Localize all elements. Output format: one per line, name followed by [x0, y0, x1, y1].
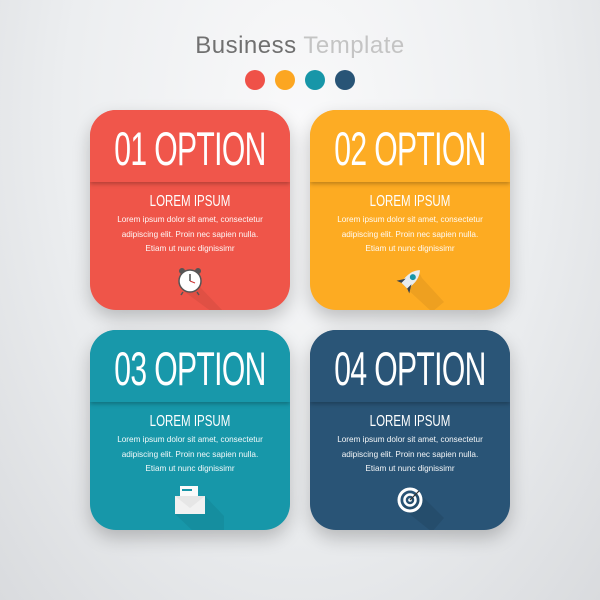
icon: alarm clock: [178, 268, 222, 310]
text block: Etiam ut nunc dignissimr: [365, 244, 455, 253]
heading: 04 option: 04 OPTION: [334, 342, 486, 395]
text block: Lorem ipsum dolor sit amet, consectetur: [337, 215, 483, 224]
icon: rocket: [396, 270, 444, 310]
subheading: LOREM IPSUM: [370, 413, 450, 430]
panel: option 02: [310, 110, 510, 310]
color dots: [245, 70, 355, 90]
heading: 03 option: 03 OPTION: [114, 342, 266, 395]
heading: 01 option: 01 OPTION: [114, 122, 266, 175]
subheading: LOREM IPSUM: [370, 193, 450, 210]
text block: Lorem ipsum dolor sit amet, consectetur: [117, 215, 263, 224]
text block: [337, 215, 483, 253]
text block: Lorem ipsum dolor sit amet, consectetur: [337, 435, 483, 444]
text block: Etiam ut nunc dignissimr: [145, 244, 235, 253]
subheading: LOREM IPSUM: [150, 413, 230, 430]
text block: adipiscing elit. Proin nec sapien nulla.: [122, 230, 258, 238]
text block: [337, 435, 483, 473]
text block: [117, 215, 263, 253]
text block: adipiscing elit. Proin nec sapien nulla.: [342, 230, 478, 238]
text block: Lorem ipsum dolor sit amet, consectetur: [117, 435, 263, 444]
panel: option 01: [90, 110, 290, 310]
panel: option 04: [310, 330, 510, 530]
title: Business Template: [195, 32, 405, 59]
text block: adipiscing elit. Proin nec sapien nulla.: [122, 450, 258, 458]
icon: target: [398, 488, 444, 530]
panel: option 03: [90, 330, 290, 530]
subheading: LOREM IPSUM: [150, 193, 230, 210]
icon: envelope: [175, 486, 224, 530]
text block: Etiam ut nunc dignissimr: [145, 464, 235, 473]
text block: Etiam ut nunc dignissimr: [365, 464, 455, 473]
text block: [117, 435, 263, 473]
heading: 02 option: 02 OPTION: [334, 122, 486, 175]
text block: adipiscing elit. Proin nec sapien nulla.: [342, 450, 478, 458]
